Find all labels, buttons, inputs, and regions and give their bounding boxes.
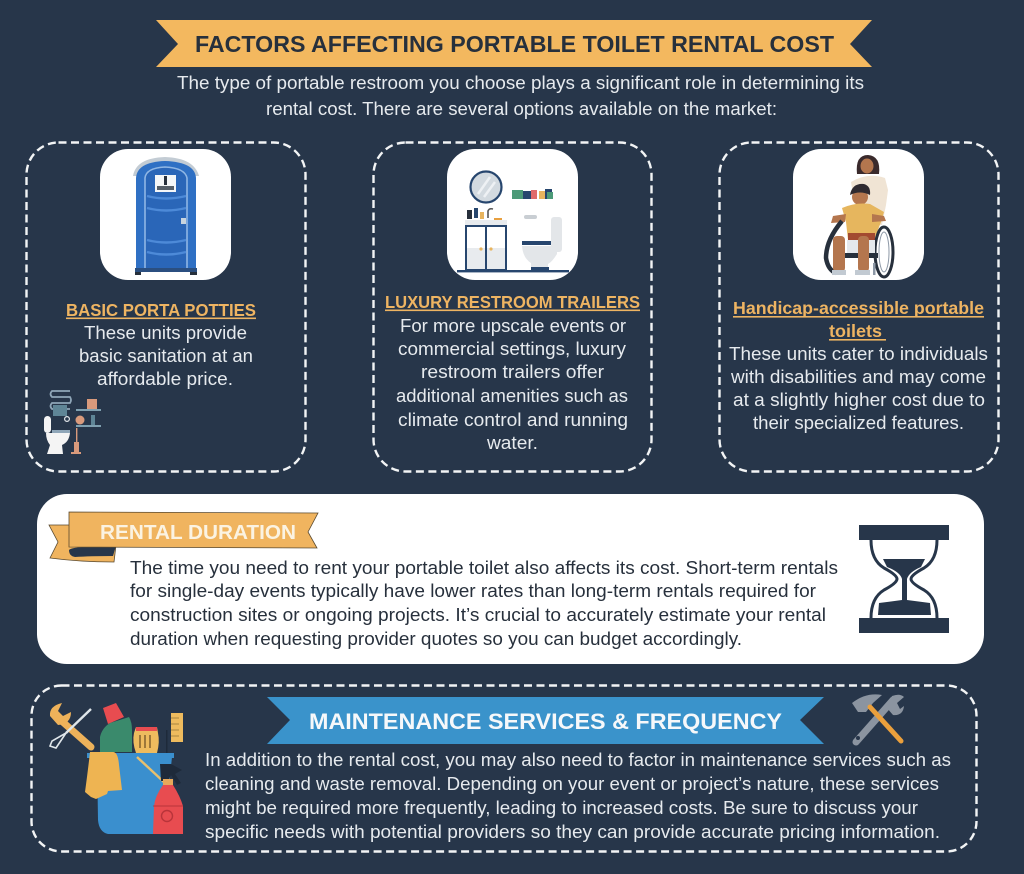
text: handicap-accessible portable toilets: their specialized features. <box>753 413 964 433</box>
icon: small bathroom <box>44 391 101 454</box>
heading: luxury restroom trailers: LUXURY RESTROOM TRAILERS <box>385 292 640 312</box>
text: rental duration <box>130 558 838 649</box>
text: basic porta potties: basic sanitation at an <box>79 346 253 366</box>
text: luxury restroom trailers <box>396 316 628 453</box>
panel: luxury restroom trailers <box>374 142 652 472</box>
intro text <box>177 73 864 119</box>
heading: handicap-accessible portable toilets: Handicap-accessible portable <box>733 298 984 318</box>
icon: hammer and wrench <box>852 694 904 742</box>
text: maintenance services: cleaning and waste removal. Depending on your event or project’s nature, these services <box>205 774 939 794</box>
text: luxury restroom trailers: water. <box>486 433 538 453</box>
text: luxury restroom trailers: commercial settings, luxury <box>398 339 626 359</box>
text: maintenance services <box>205 750 951 842</box>
text: rental duration: The time you need to rent your portable toilet also affects its cost. Short-term rentals <box>130 558 838 578</box>
heading: basic porta potties: BASIC PORTA POTTIES <box>66 300 256 320</box>
intro text: The type of portable restroom you choose plays a significant role in determining its <box>177 73 864 93</box>
panel: basic porta potties <box>26 142 306 472</box>
text: luxury restroom trailers: For more upscale events or <box>400 316 626 336</box>
ribbon: rental duration: RENTAL DURATION <box>100 522 296 544</box>
panel: rental duration <box>37 494 984 664</box>
icon: hourglass <box>859 525 949 633</box>
title banner <box>156 20 872 67</box>
heading: handicap-accessible portable toilets: toilets <box>829 321 882 341</box>
text: maintenance services: might be required more frequently, leading to increased costs. Be sure to discuss your <box>205 798 918 818</box>
text: basic porta potties <box>79 323 253 389</box>
text: maintenance services: In addition to the rental cost, you may also need to factor in maintenance services such as <box>205 750 951 770</box>
panel: handicap-accessible toilets <box>720 142 998 472</box>
icon: luxury bathroom <box>447 149 578 280</box>
text: rental duration: duration when requesting provider quotes so you can budget accordingly. <box>130 629 742 649</box>
heading: handicap-accessible portable toilets <box>733 298 984 341</box>
text: handicap-accessible portable toilets: with disabilities and may come <box>730 367 986 387</box>
text: handicap-accessible portable toilets: at a slightly higher cost due to <box>733 390 985 410</box>
title banner: FACTORS AFFECTING PORTABLE TOILET RENTAL COST <box>195 31 834 57</box>
text: luxury restroom trailers: climate control and running <box>398 410 628 430</box>
banner: maintenance services: MAINTENANCE SERVICES & FREQUENCY <box>309 709 782 734</box>
text: luxury restroom trailers: additional amenities such as <box>396 386 628 406</box>
icon: cleaning bucket and tools <box>50 703 183 834</box>
intro text: rental cost. There are several options available on the market: <box>266 99 777 119</box>
text: maintenance services: specific needs with potential providers so they can provide accurate pricing information. <box>205 822 940 842</box>
ribbon: rental duration <box>49 512 318 562</box>
banner: maintenance services <box>267 697 824 744</box>
text: handicap-accessible portable toilets: These units cater to individuals <box>729 344 988 364</box>
icon: person in wheelchair <box>793 149 924 280</box>
panel: maintenance services and frequency <box>32 686 976 852</box>
text: basic porta potties: These units provide <box>84 323 247 343</box>
text: basic porta potties: affordable price. <box>97 369 233 389</box>
text: rental duration: for single-day events typically have lower rates than long-term rentals required for <box>130 581 816 601</box>
text: handicap-accessible portable toilets <box>729 344 988 433</box>
text: rental duration: construction sites or ongoing projects. It’s crucial to accurately estimate your rental <box>130 605 826 625</box>
text: luxury restroom trailers: restroom trailers offer <box>421 362 604 382</box>
icon: blue porta potty <box>100 149 231 280</box>
